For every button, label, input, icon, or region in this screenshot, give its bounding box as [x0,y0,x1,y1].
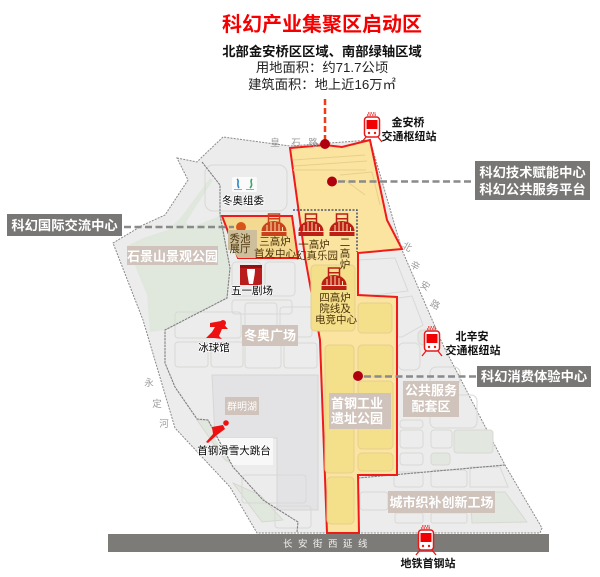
site map [113,137,542,533]
river label: 永定河: 永 [144,377,154,389]
label: 石景山景观公园: 石景山景观公园 [127,249,218,264]
white plot [215,438,273,465]
leader: top red dashed [324,99,326,140]
label: 首钢滑雪大跳台: 首钢滑雪大跳台 [197,444,271,457]
label: 冬奥组委: 冬奥组委 [222,194,264,207]
icon: 冬奥组委 logos [232,177,257,192]
callout: 科幻国际交流中心 [7,214,122,236]
subtitle text block: 建筑面积：地上近16万㎡ [248,77,396,92]
label: 二高炉: 炉 [340,259,350,271]
icon: train 北辛安 [422,327,442,356]
label: 四高炉院线及电竞中心: 电竞中心 [315,313,357,326]
label: 群明湖: 群明湖 [227,400,257,413]
marker: 科幻技术赋能中心 [327,176,337,186]
label: 首钢工业遗址公园 [329,393,391,429]
west zone: 三高炉 [222,216,298,258]
label: 二高炉: 高 [340,247,350,260]
label: 金安桥交通枢纽站: 金安桥 [392,115,424,129]
leader: 科幻消费体验中心 [364,375,476,378]
label: 群明湖 [225,397,259,415]
block and label: 秀池展厅 [228,230,257,258]
label: 一高炉幻真乐园: 一高炉 [298,238,330,251]
marker: 科幻消费体验中心 [353,371,363,381]
label: 四高炉院线及电竞中心: 院线及 [319,302,351,315]
label: 四高炉院线及电竞中心: 四高炉 [319,291,351,304]
river label: 永定河: 河 [159,418,169,430]
road band: 长安街西延线: 长安街西延线 [283,538,373,550]
leader: 科幻技术赋能中心 [338,180,472,183]
road grid west [175,165,317,528]
river label: 永定河 [144,377,169,430]
road label: 皇石路: 路 [308,137,318,149]
label: 城市织补创新工场 [388,491,495,513]
label: 北辛安交通枢纽站 [446,329,500,357]
subtitle text block: 北部金安桥区区域、南部绿轴区域 [222,43,422,59]
zone details [293,155,393,524]
inner dashed boundaries [165,162,505,532]
icon: furnace 2 [330,214,354,236]
subtitle text block [222,43,422,92]
icon: ski jumper [206,420,229,443]
icon: theatre 五一剧场 [240,265,262,285]
callout: 科幻消费体验中心 [477,366,591,387]
label: 冬奥广场 [242,325,298,346]
label: 北辛安交通枢纽站: 交通枢纽站 [446,343,500,357]
road grid east [358,258,527,523]
icon: skater [206,320,228,339]
river strips [197,420,283,522]
label: 金安桥交通枢纽站 [382,115,436,143]
label: 北辛安交通枢纽站: 北辛安 [456,329,488,343]
main yellow zone [290,140,402,533]
label: 二高炉: 二 [340,237,350,249]
lake block [212,375,318,510]
label: 一高炉幻真乐园 [296,238,338,262]
label: 四高炉院线及电竞中心 [315,291,357,326]
road label: 皇石路 [270,137,318,149]
dotted rectangle [293,210,357,252]
road label: 北辛安路: 辛 [408,258,422,274]
label: 三高炉首发中心: 三高炉 [259,235,291,248]
map base [113,137,542,533]
label: 二高炉 [340,237,350,271]
callout: 科幻技术赋能中心: 科幻技术赋能中心 [479,164,586,180]
marker: 科幻国际交流中心 [236,222,246,232]
label: 三高炉首发中心: 首发中心 [254,247,296,260]
callout: 科幻国际交流中心: 科幻国际交流中心 [11,217,118,233]
title: 科幻产业集聚区启动区 [222,13,422,36]
label: 首钢工业遗址公园: 首钢工业 [331,396,383,411]
block and label: 秀池展厅: 秀池 [230,232,251,245]
label: 地铁首钢站: 地铁首钢站 [400,556,456,570]
icon: furnace 3 [262,214,286,236]
icon: furnace 4 [322,268,346,290]
label: 五一剧场: 五一剧场 [231,284,273,297]
river label: 永定河: 定 [152,398,162,410]
road label: 北辛安路: 北 [400,240,414,255]
label: 冰球馆: 冰球馆 [198,341,230,354]
label: 冬奥广场: 冬奥广场 [244,328,296,343]
icon: furnace 1 [298,214,324,236]
road band: 长安街西延线 [108,534,549,552]
callout: 科幻技术赋能中心 [475,161,590,200]
label: 首钢工业遗址公园: 遗址公园 [331,411,383,426]
label: 城市织补创新工场: 城市织补创新工场 [389,495,494,510]
road label: 北辛安路: 路 [428,297,443,313]
subtitle text block: 用地面积：约71.7公顷 [256,60,388,75]
label: 三高炉首发中心 [254,235,296,260]
label: 一高炉幻真乐园: 幻真乐园 [296,249,338,262]
callout: 科幻技术赋能中心: 科幻公共服务平台 [479,181,586,197]
leader: 科幻国际交流中心 [124,226,234,228]
road label: 皇石路: 石 [291,138,301,149]
label: 公共服务配套区 [403,381,459,417]
road label: 皇石路: 皇 [270,137,280,149]
road label: 北辛安路 [400,240,443,313]
block and label: 秀池展厅: 展厅 [230,243,250,255]
icon: train 金安桥 [362,113,382,142]
road label: 北辛安路: 安 [418,278,432,294]
label: 金安桥交通枢纽站: 交通枢纽站 [382,129,436,143]
label: 公共服务配套区: 公共服务 [405,383,457,398]
icon: train 地铁首钢站 [416,526,436,555]
park [127,178,230,332]
marker: top dot [320,139,330,149]
label: 公共服务配套区: 配套区 [411,399,451,414]
callout: 科幻消费体验中心: 科幻消费体验中心 [481,368,587,384]
